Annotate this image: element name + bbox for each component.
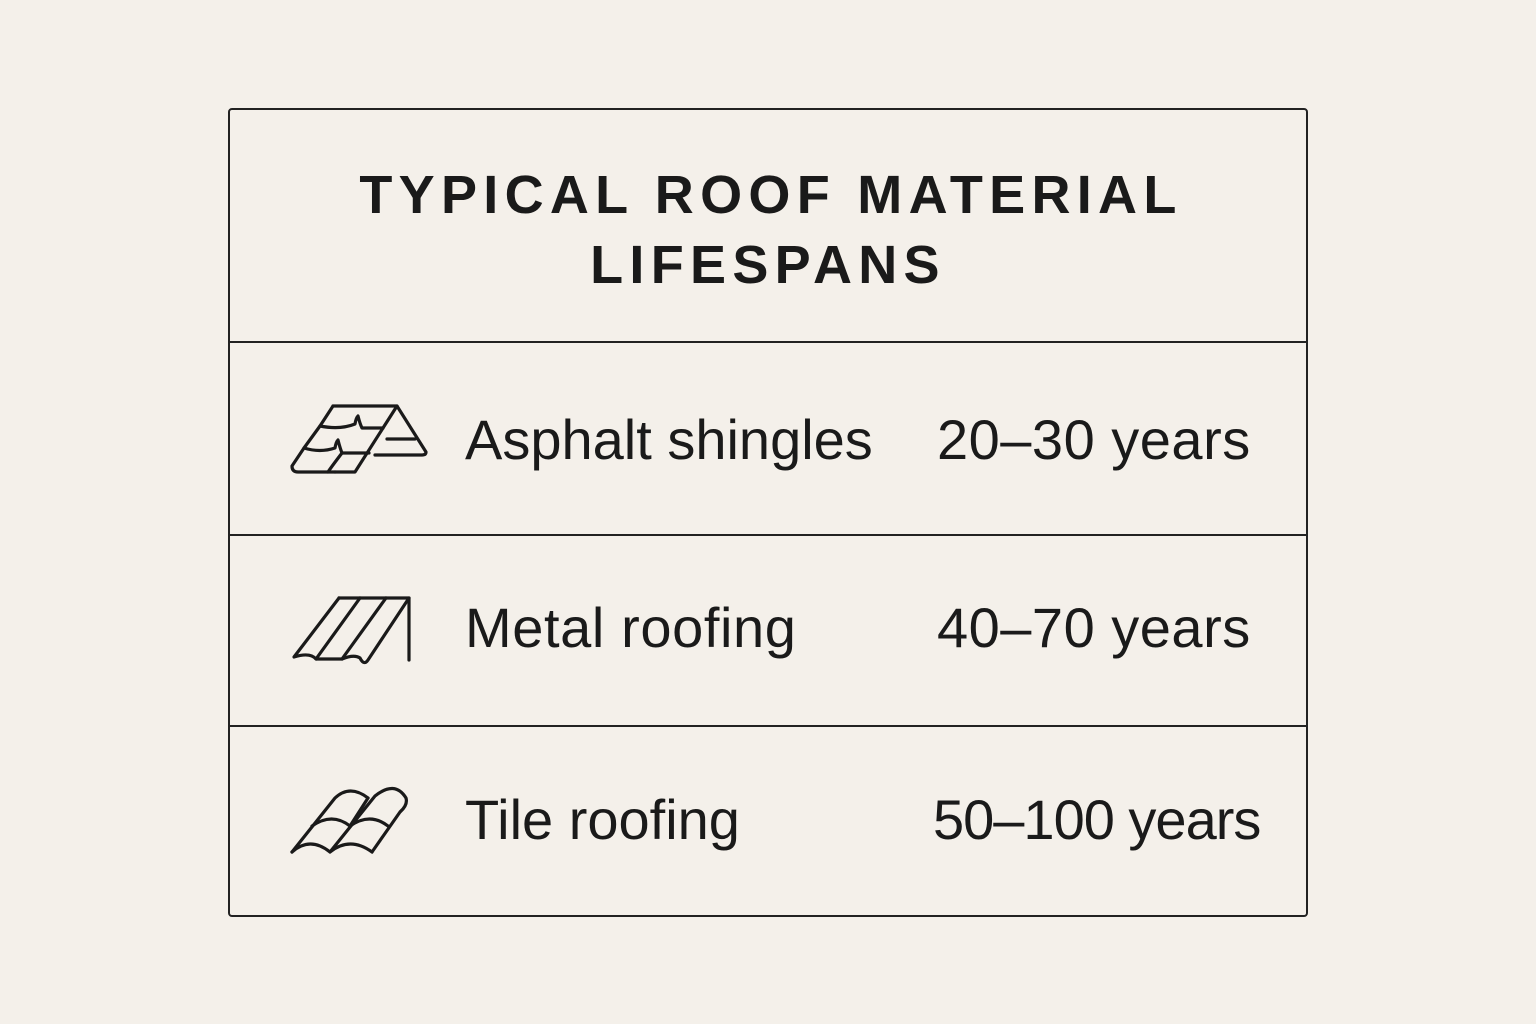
title — [359, 165, 1183, 295]
text: asphalt shingles: Asphalt shingles — [465, 408, 873, 471]
icon: metal roofing — [292, 596, 411, 664]
table panel — [228, 108, 1308, 917]
title: TYPICAL ROOF MATERIAL — [359, 165, 1183, 225]
text: tile years: 50–100 years — [933, 788, 1260, 851]
text: tile roofing: Tile roofing — [465, 788, 740, 851]
title: LIFESPANS — [590, 235, 946, 295]
text: metal roofing: Metal roofing — [465, 596, 797, 659]
text: asphalt years: 20–30 years — [937, 408, 1251, 471]
icon: asphalt shingles — [290, 404, 428, 474]
icon: tile roofing — [290, 786, 408, 854]
text: metal years: 40–70 years — [937, 596, 1251, 659]
